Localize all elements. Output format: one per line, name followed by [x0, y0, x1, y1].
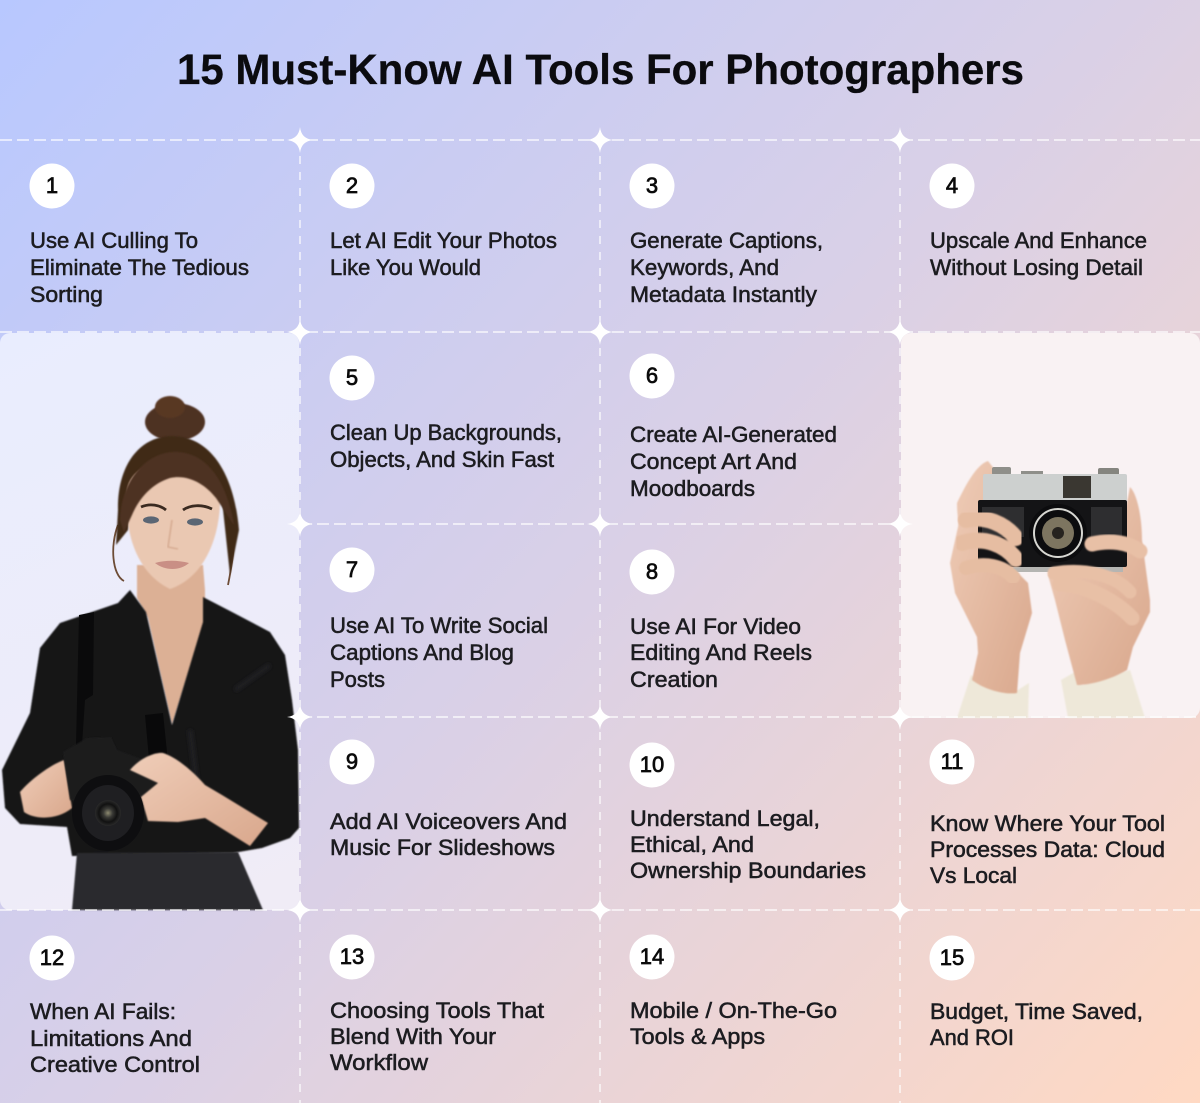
neck and chest — [137, 565, 205, 725]
panel: item 13 — [330, 934, 544, 1075]
panel: item 7: Use AI To Write Social — [330, 613, 548, 638]
panel: item 6: Moodboards — [630, 476, 755, 501]
panel: item 4: 4 — [946, 173, 958, 198]
right palm — [1048, 487, 1150, 685]
panel: item 12: Limitations And — [30, 1026, 192, 1051]
panel: item 3: Keywords, And — [630, 255, 779, 280]
corner stars — [287, 127, 913, 923]
viewfinder — [1063, 476, 1091, 498]
left fingers — [962, 519, 1016, 577]
panel: item 8: Creation — [630, 667, 718, 692]
face — [127, 462, 220, 589]
panel: item 9 — [330, 740, 567, 860]
panel: item 13: Blend With Your — [330, 1024, 496, 1049]
panel: item 3: 3 — [646, 173, 658, 198]
panel: item 3: Generate Captions, — [630, 228, 823, 253]
panel: item 11: Vs Local — [930, 863, 1017, 888]
panel: item 8 — [630, 550, 812, 692]
panel: item 1: Eliminate The Tedious — [30, 255, 249, 280]
right sweater cuff — [1061, 670, 1145, 718]
panel: item 8: Use AI For Video — [630, 614, 801, 639]
panel: item 9: Music For Slideshows — [330, 835, 555, 860]
panel: item 9: 9 — [346, 749, 358, 774]
panel: item 12 — [30, 936, 200, 1077]
leatherette panels — [982, 507, 1024, 537]
panel: item 13: Workflow — [330, 1050, 428, 1075]
left sweater cuff — [957, 675, 1029, 718]
panel: item 8: Editing And Reels — [630, 640, 812, 665]
panel: item 12: Creative Control — [30, 1052, 200, 1077]
panel: item 4 — [930, 164, 1147, 280]
panel: item 4: Upscale And Enhance — [930, 228, 1147, 253]
panel: item 3: Metadata Instantly — [630, 282, 817, 307]
lens — [72, 775, 144, 851]
panel: item 10: Ownership Boundaries — [630, 858, 866, 883]
panel: item 2 — [330, 164, 557, 280]
panel: item 15 — [930, 936, 1143, 1050]
panel: item 1: Use AI Culling To — [30, 228, 198, 253]
panel: item 10: 10 — [640, 752, 664, 777]
panel: item 14: 14 — [640, 944, 664, 969]
right hand — [130, 753, 268, 846]
panel: item 10: Ethical, And — [630, 832, 754, 857]
panel: item 6: Create AI-Generated — [630, 422, 837, 447]
jeans — [72, 852, 263, 910]
panel: item 2: Like You Would — [330, 255, 481, 280]
camera body — [63, 737, 165, 815]
shirt fold highlights — [190, 665, 270, 810]
panel: item 6: Concept Art And — [630, 449, 797, 474]
panel: item 5: 5 — [346, 365, 358, 390]
panel: item 10 — [630, 742, 866, 883]
panel: item 14: Mobile / On-The-Go — [630, 998, 837, 1023]
panel: item 9: Add AI Voiceovers And — [330, 809, 567, 834]
panel: item 6 — [630, 354, 837, 501]
panel: item 2: 2 — [346, 173, 358, 198]
panel: item 12: 12 — [40, 945, 64, 970]
panel: item 1 — [30, 164, 249, 307]
camera dials — [992, 467, 1011, 475]
panel: item 8: 8 — [646, 559, 658, 584]
right fingers — [1054, 542, 1140, 618]
panel: item 1: 1 — [46, 173, 58, 198]
camera silver top — [983, 474, 1127, 501]
panel: photo of hands holding camera — [901, 333, 1200, 718]
bun — [145, 403, 205, 441]
black shirt — [2, 590, 299, 856]
panel: item 15: Budget, Time Saved, — [930, 999, 1143, 1024]
panel: item 7: Posts — [330, 667, 385, 692]
panel: item 6: 6 — [646, 363, 658, 388]
panel: item 15: And ROI — [930, 1025, 1014, 1050]
photo: hands with vintage camera — [950, 461, 1150, 718]
panel: item 5: Clean Up Backgrounds, — [330, 420, 562, 445]
left palm and thumb — [950, 461, 1032, 693]
camera black body — [978, 500, 1127, 567]
panel: item 3 — [630, 164, 823, 307]
panel: item 7: 7 — [346, 557, 358, 582]
lens — [1029, 504, 1087, 562]
back hair strands — [113, 505, 234, 585]
panel: item 14 — [630, 934, 837, 1049]
panel: item 13: Choosing Tools That — [330, 998, 544, 1023]
photo: woman with camera — [2, 396, 299, 910]
panel: item 13: 13 — [340, 944, 364, 969]
title panel — [0, 0, 1200, 139]
panel: item 4: Without Losing Detail — [930, 255, 1143, 280]
left forearm — [20, 760, 72, 818]
panel: item 10: Understand Legal, — [630, 806, 820, 831]
title: 15 Must-Know AI Tools For Photographers — [177, 46, 1024, 94]
panel: item 15: 15 — [940, 945, 964, 970]
panel: item 1: Sorting — [30, 282, 103, 307]
panel: item 5 — [330, 356, 562, 472]
panel: item 11: Know Where Your Tool — [930, 811, 1165, 836]
panel: item 5: Objects, And Skin Fast — [330, 447, 554, 472]
panel: item 11 — [930, 740, 1165, 888]
fringe — [120, 452, 234, 532]
panel: item 2: Let AI Edit Your Photos — [330, 228, 557, 253]
panel: item 11: 11 — [941, 749, 963, 774]
panel: item 11: Processes Data: Cloud — [930, 837, 1165, 862]
panel: item 7 — [330, 548, 548, 692]
panel: photo of photographer — [0, 333, 299, 910]
panel: item 7: Captions And Blog — [330, 640, 514, 665]
panel: item 12: When AI Fails: — [30, 999, 176, 1024]
eyebrows, eyes, mouth — [141, 505, 212, 510]
panel: item 14: Tools & Apps — [630, 1024, 765, 1049]
strap — [76, 612, 94, 745]
hair — [116, 436, 239, 575]
